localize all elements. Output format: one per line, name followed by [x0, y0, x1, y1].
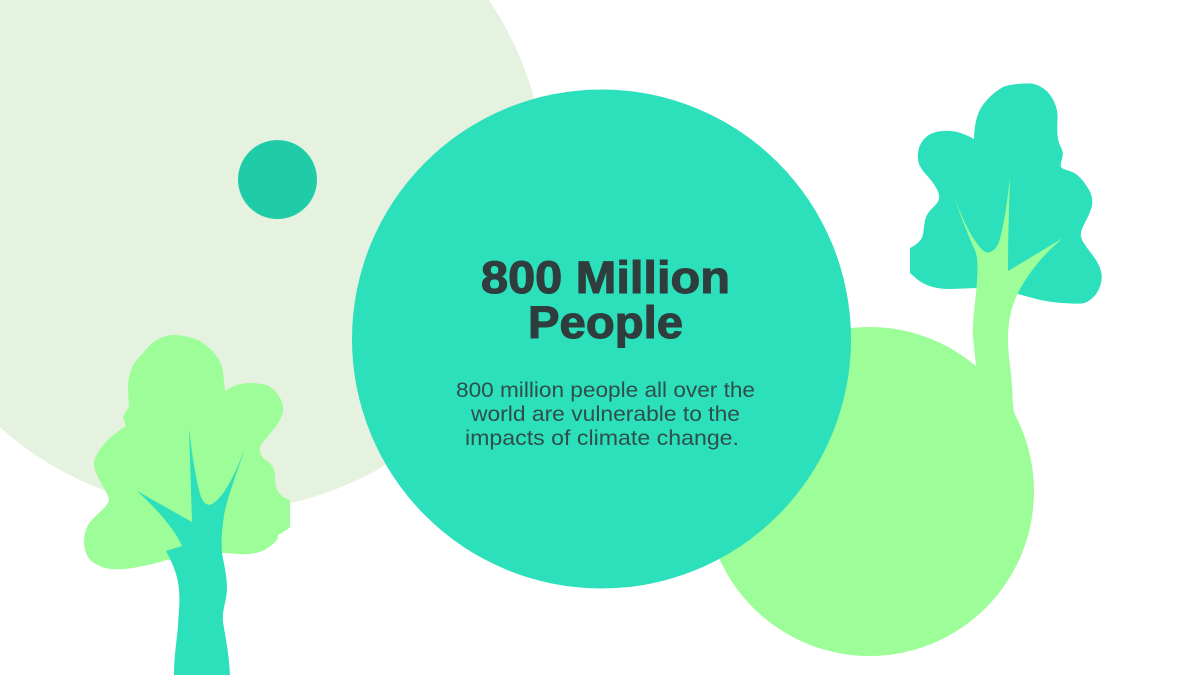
heading	[481, 252, 730, 348]
icon: left tree	[84, 335, 290, 675]
pale green background circle	[0, 0, 546, 511]
right tree trunk	[953, 177, 1063, 420]
small teal circle	[238, 140, 317, 219]
right tree crown	[910, 83, 1102, 304]
large teal circle	[352, 90, 851, 588]
light green circle	[705, 327, 1034, 656]
icon: right tree	[910, 83, 1102, 420]
body text	[456, 378, 755, 450]
heading: People	[528, 297, 683, 348]
heading: 800 Million	[481, 252, 730, 303]
body text: 800 million people all over the	[456, 378, 755, 402]
left tree crown	[84, 335, 290, 569]
body text: world are vulnerable to the	[470, 402, 740, 426]
body text: impacts of climate change.	[465, 426, 739, 450]
left tree trunk	[137, 428, 246, 675]
